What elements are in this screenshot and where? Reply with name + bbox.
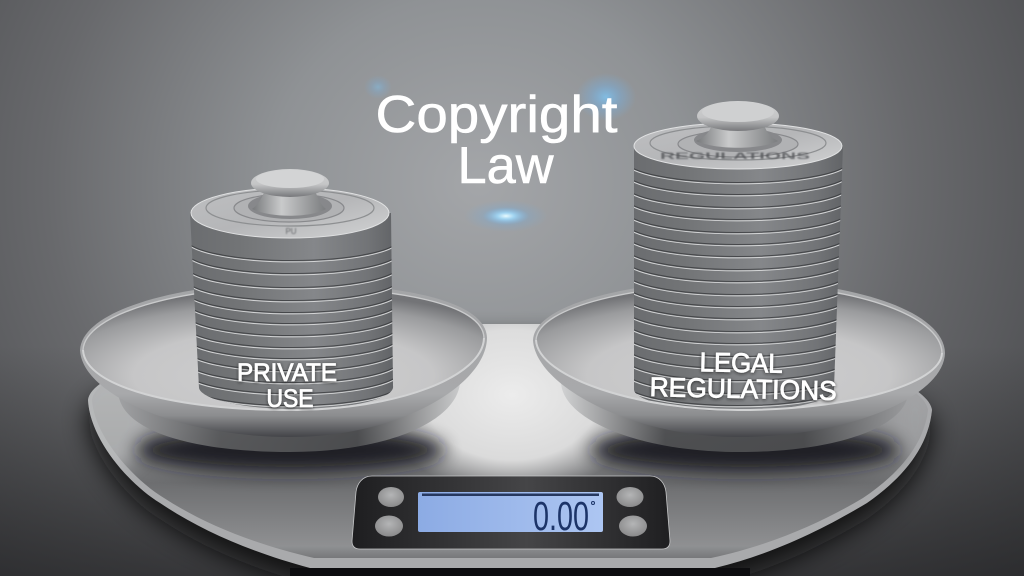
glow: left sparkle <box>364 75 392 99</box>
label: private use <box>237 359 337 413</box>
left stack body <box>190 213 394 409</box>
label: legal regulations: LEGAL <box>699 347 783 379</box>
button: bottom left <box>375 516 403 536</box>
right bright corner under pan <box>897 392 932 456</box>
left pan shadow on base <box>135 427 445 473</box>
base bright centre <box>402 324 624 476</box>
scale base <box>88 324 932 568</box>
glow: centre sparkle <box>464 200 548 232</box>
left stack top face: PU <box>285 227 297 236</box>
title <box>376 86 618 195</box>
left bright corner under pan <box>88 384 152 470</box>
title: Copyright <box>376 86 618 144</box>
right pan <box>533 280 945 437</box>
right stack knob <box>694 101 782 152</box>
right pan front lip <box>536 340 942 410</box>
title: Law <box>458 137 554 195</box>
left weight stack <box>185 169 400 415</box>
left pan foot <box>118 370 460 452</box>
label: private use: PRIVATE <box>237 359 337 387</box>
right stack body <box>634 146 843 411</box>
right weight stack <box>625 101 850 420</box>
left stack knob <box>248 169 332 219</box>
LCD display: 0.00 <box>533 493 589 539</box>
label: private use: USE <box>266 385 314 413</box>
base shadow on table <box>88 340 932 576</box>
left pan front lip <box>83 338 484 410</box>
right stack top face: REGULATIONS <box>660 151 810 161</box>
button: top right <box>616 487 644 507</box>
base bottom black strip <box>290 568 750 576</box>
label: legal regulations <box>649 347 837 406</box>
button: bottom right <box>619 516 647 536</box>
right stack top face <box>634 123 842 169</box>
left pan <box>80 283 487 437</box>
control panel <box>352 476 670 549</box>
button: top left <box>378 487 404 507</box>
right pan foot <box>561 370 908 452</box>
left stack top face <box>191 188 389 238</box>
glow: right sparkle <box>576 73 636 121</box>
label: legal regulations: REGULATIONS <box>649 372 837 406</box>
LCD display <box>418 492 603 539</box>
right pan shadow on base <box>590 427 900 473</box>
